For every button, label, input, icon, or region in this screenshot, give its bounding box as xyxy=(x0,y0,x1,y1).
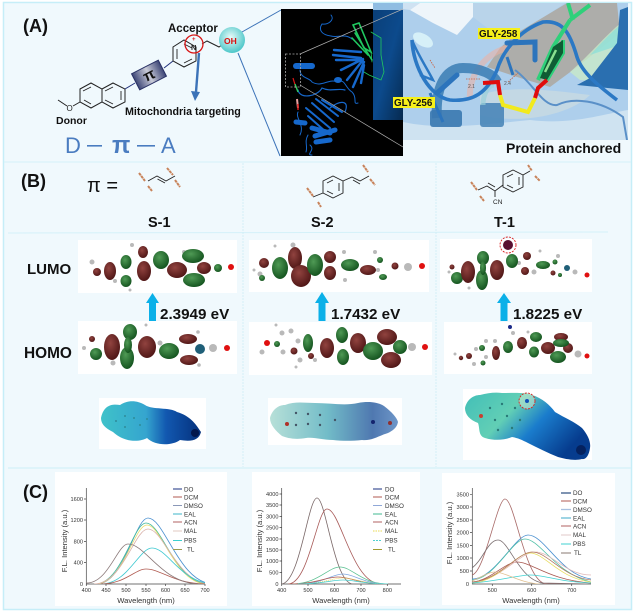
D-pi-A formula: A xyxy=(161,133,176,158)
ligand sticks xyxy=(538,20,570,80)
chart 1 axes: Wavelength (nm) xyxy=(117,596,175,605)
chart 2 legend: MAL xyxy=(385,528,398,535)
translucent surface overlap xyxy=(373,10,403,120)
chart 2 axes: 1500 xyxy=(266,548,278,554)
chart 3 axes: 700 xyxy=(567,588,576,594)
chart 1 axes: 1600 xyxy=(71,497,83,503)
structure S-1 xyxy=(139,168,180,191)
T-1 HOMO orbital xyxy=(444,322,592,374)
protein ribbon xyxy=(412,22,617,100)
chart 3 legend: DMSO xyxy=(573,507,592,514)
chart 1 axes xyxy=(60,488,210,605)
label B: (B) xyxy=(21,171,46,191)
S-2 electrostatic potential map xyxy=(268,398,402,445)
donor label: Donor xyxy=(56,115,87,127)
chart 2 curves xyxy=(281,498,388,584)
selection box xyxy=(286,54,300,87)
chart 1 legend: MAL xyxy=(184,528,197,535)
chart 2 axes: 0 xyxy=(275,582,278,588)
D-pi-A formula xyxy=(65,132,176,159)
chart 2 axes: 1000 xyxy=(266,559,278,565)
chart 3 axes: 1000 xyxy=(457,556,469,562)
chart 1: S-1 fluorescence xyxy=(55,472,227,606)
chart 1 legend: EAL xyxy=(184,512,196,518)
chart 1 axes: 650 xyxy=(180,588,190,594)
thin loop xyxy=(515,70,627,140)
chart 2 axes xyxy=(255,488,401,605)
chart 2 axes: F.L. Intensity (a.u.) xyxy=(255,509,264,572)
translucent helix turns xyxy=(437,68,497,118)
S-1 energy gap arrow: 2.3949 eV xyxy=(160,306,230,323)
chart 1 legend: ACN xyxy=(184,520,198,526)
D-pi-A formula: D xyxy=(65,133,81,158)
structure T-1: CN xyxy=(493,199,503,206)
chart 2 axes: 400 xyxy=(277,588,286,594)
protein overview xyxy=(281,3,403,156)
green domain xyxy=(352,23,384,80)
targeting arrow xyxy=(191,53,200,101)
chart 3 legend: DCM xyxy=(573,498,587,506)
acceptor ring highlight: N xyxy=(191,43,196,52)
chart 2 legend: TL xyxy=(388,546,396,554)
chart 1 axes: 600 xyxy=(161,588,170,594)
chart 1 axes: 400 xyxy=(74,560,83,566)
D-pi-A formula: π xyxy=(112,132,130,159)
T-1 energy gap arrow xyxy=(497,293,583,323)
binding site surface xyxy=(403,3,628,140)
binding site surface: 2.1 xyxy=(468,84,475,90)
chart 2 legend: EAL xyxy=(385,512,397,518)
pi box: π xyxy=(140,65,159,86)
mitochondria targeting label: Mitochondria targeting xyxy=(125,106,241,118)
chart 2 axes: Wavelength (nm) xyxy=(312,596,370,605)
chart 1 axes: 400 xyxy=(82,588,91,594)
panel B xyxy=(21,165,592,460)
S-2 HOMO orbital xyxy=(249,322,432,375)
chart 2 axes: 2500 xyxy=(266,526,278,532)
molecule: donor-pi-acceptor: O xyxy=(66,104,73,113)
label A: (A) xyxy=(23,16,48,36)
chart 3 axes: 500 xyxy=(488,588,497,594)
chart 1 legend xyxy=(173,486,203,554)
chart 3: T-1 fluorescence xyxy=(442,473,615,605)
binding site surface: 2.4 xyxy=(504,81,511,87)
chart 3 legend xyxy=(561,490,592,557)
chart 1 legend: DMSO xyxy=(184,503,203,510)
chart 3 axes: 2500 xyxy=(457,518,469,524)
chart 2 axes: 500 xyxy=(303,588,313,594)
GLY-256 label: GLY-256 xyxy=(394,98,433,109)
T-1 electrostatic potential map xyxy=(463,389,592,460)
chart 3 legend: TL xyxy=(574,550,582,557)
chart 2: S-2 fluorescence xyxy=(252,472,420,606)
chart 2 axes: 700 xyxy=(356,588,366,594)
chart 2 legend: DO xyxy=(385,486,395,494)
chart 3 axes: Wavelength (nm) xyxy=(502,596,560,605)
chart 3 axes xyxy=(445,488,591,605)
chart 3 axes: 600 xyxy=(527,588,536,594)
acceptor label: Acceptor xyxy=(168,23,218,35)
chart 1 axes: 800 xyxy=(74,540,83,546)
chart 3 legend: PBS xyxy=(573,541,586,548)
S-2 energy gap arrow: 1.7432 eV xyxy=(331,306,401,323)
upper domain xyxy=(296,15,364,103)
molecule: donor-pi-acceptor xyxy=(58,27,245,113)
GLY-258 label: GLY-258 xyxy=(479,29,518,40)
chart 1 curves xyxy=(86,518,215,584)
chart 1 axes: 550 xyxy=(141,588,151,594)
chart 3 axes: 3000 xyxy=(457,505,469,511)
panel A xyxy=(23,3,628,159)
OH sphere: OH xyxy=(224,36,237,46)
compound name T-1: T-1 xyxy=(494,215,515,231)
S-2 energy gap arrow xyxy=(315,292,401,323)
S-1 electrostatic potential map xyxy=(99,398,206,449)
chart 1 legend: DCM xyxy=(184,494,198,502)
chart 1 axes: F.L. Intensity (a.u.) xyxy=(60,509,69,572)
chart 1 legend: PBS xyxy=(184,538,197,544)
pi box xyxy=(132,60,166,90)
chart 3 axes: 3500 xyxy=(457,492,469,498)
compound name S-2: S-2 xyxy=(311,215,334,231)
chart 1 legend: TL xyxy=(187,546,195,554)
protein anchored caption: Protein anchored xyxy=(506,140,621,156)
S-1 HOMO orbital xyxy=(78,321,237,374)
OH sphere xyxy=(219,27,245,53)
chart 1 axes: 700 xyxy=(200,588,210,594)
chart 3 legend: MAL xyxy=(573,532,586,539)
chart 1 axes: 0 xyxy=(80,582,83,588)
chart 2 legend: DMSO xyxy=(385,503,404,510)
side chain sticks xyxy=(437,42,535,93)
S-1 LUMO orbital xyxy=(78,240,237,293)
chart 1 legend: DO xyxy=(184,486,194,494)
structure T-1 xyxy=(471,165,540,206)
bound ligand xyxy=(293,78,296,88)
chart 1 axes: 1200 xyxy=(71,518,83,524)
S-2 LUMO orbital xyxy=(249,240,429,292)
zoom lines to protein xyxy=(238,10,281,156)
acceptor ring highlight: + xyxy=(192,37,196,43)
pi equals: π = xyxy=(87,175,118,197)
chart 2 axes: 4000 xyxy=(266,492,278,498)
chart 3 axes: 1500 xyxy=(457,544,469,550)
chart 2 axes: 800 xyxy=(383,588,392,594)
lower domain xyxy=(296,88,346,155)
T-1 energy gap arrow: 1.8225 eV xyxy=(513,306,583,323)
chart 3 axes: F.L. Intensity (a.u.) xyxy=(445,501,454,564)
label C: (C) xyxy=(23,482,48,502)
T-1 LUMO orbital xyxy=(440,237,592,292)
chart 3 axes: 0 xyxy=(466,582,469,588)
HOMO row label: HOMO xyxy=(24,345,72,362)
chart 3 legend: DO xyxy=(573,490,583,497)
chart 3 axes: 500 xyxy=(460,569,469,575)
chart 2 axes: 2000 xyxy=(266,537,278,543)
chart 2 legend xyxy=(373,486,404,554)
chart 2 axes: 600 xyxy=(330,588,339,594)
S-1 energy gap arrow xyxy=(146,293,230,323)
LUMO row label: LUMO xyxy=(27,261,71,278)
chart 2 axes: 3000 xyxy=(266,514,278,520)
structure S-2 xyxy=(307,165,375,207)
chart 3 legend: ACN xyxy=(573,524,587,530)
chart 3 legend: EAL xyxy=(573,516,585,522)
panel C xyxy=(23,472,615,606)
solid blue lobe xyxy=(577,7,628,90)
chart 2 legend: PBS xyxy=(385,538,398,544)
chart 1 axes: 500 xyxy=(121,588,131,594)
compound name S-1: S-1 xyxy=(148,215,171,231)
acceptor ring highlight xyxy=(185,35,203,53)
chart 1 axes: 450 xyxy=(101,588,111,594)
chart 2 legend: ACN xyxy=(385,520,399,526)
chart 3 curves xyxy=(472,499,591,584)
pink contact ring xyxy=(470,47,510,100)
chart 2 axes: 3500 xyxy=(266,503,278,509)
chart 2 axes: 500 xyxy=(269,570,278,576)
chart 3 axes: 2000 xyxy=(457,530,469,536)
chart 2 legend: DCM xyxy=(385,494,399,502)
